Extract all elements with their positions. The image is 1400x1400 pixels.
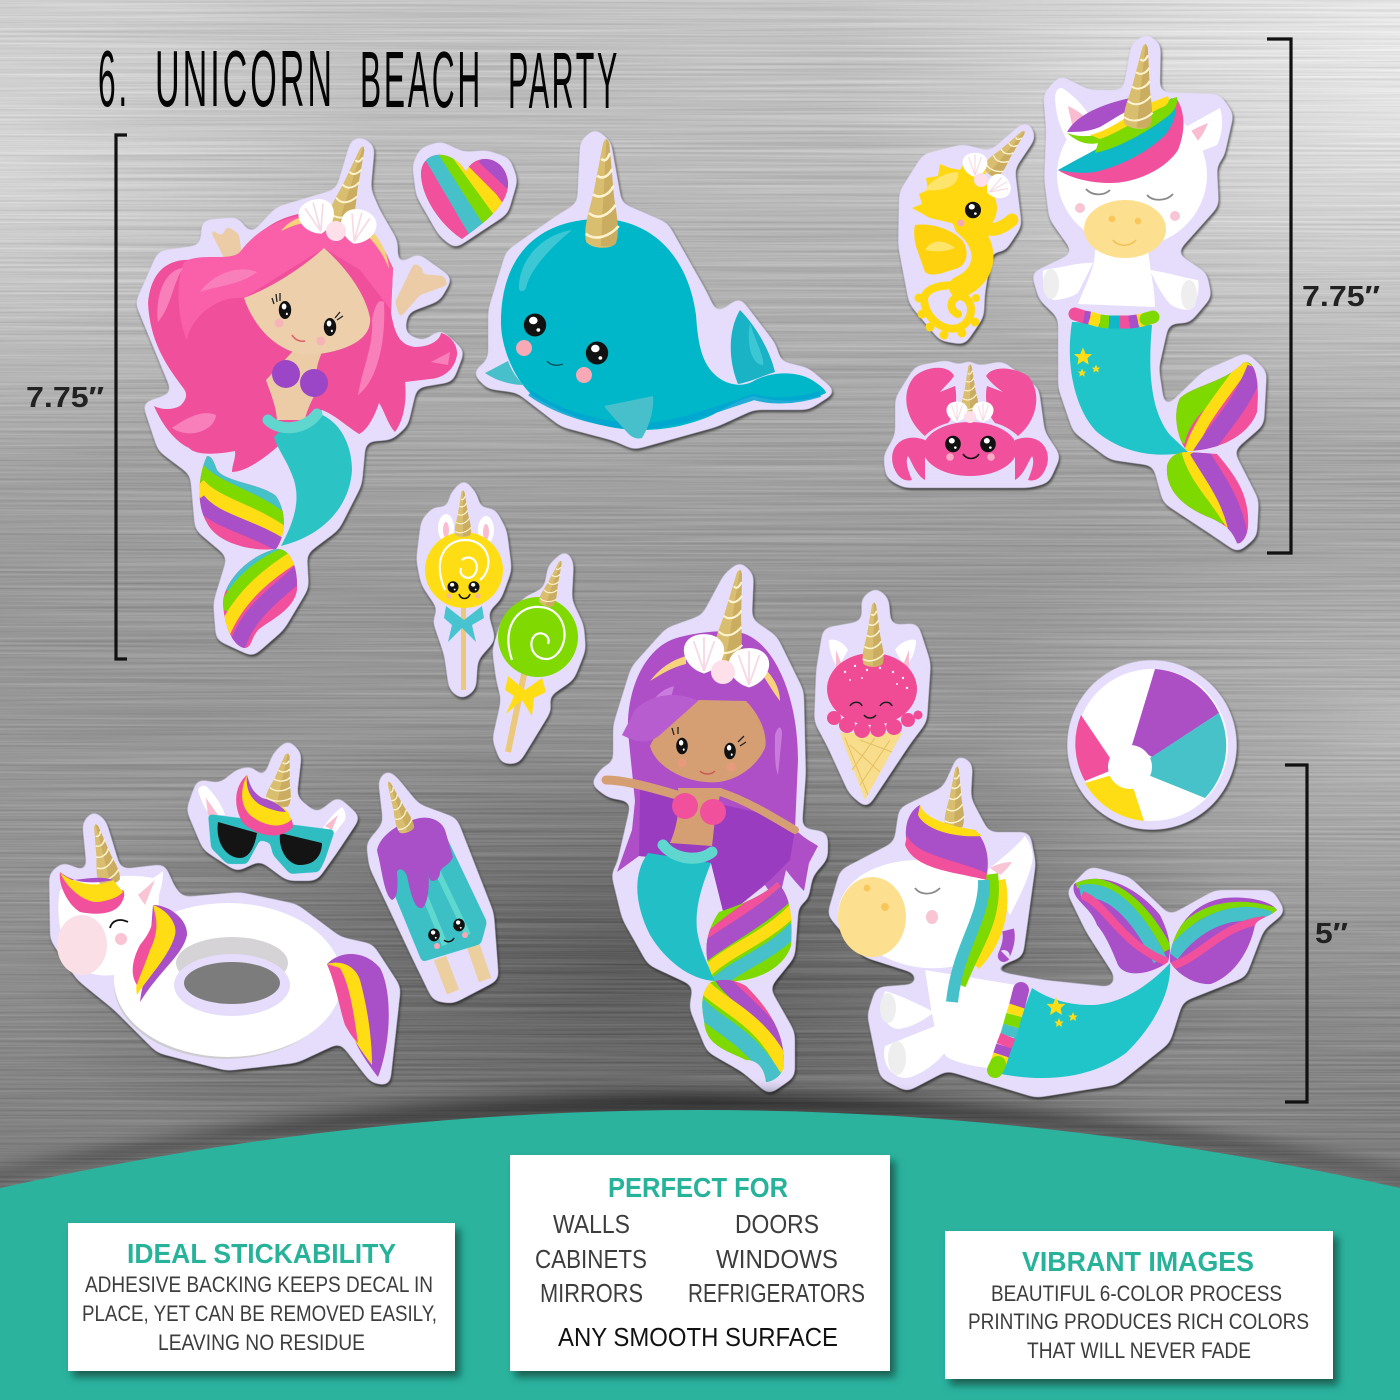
body text: LEAVING NO RESIDUE: [158, 1330, 365, 1355]
sticker: purple mermaid: [590, 561, 828, 1095]
die-cut backing: [1067, 660, 1237, 830]
face: [850, 702, 892, 718]
face: [650, 700, 766, 782]
die-cut backing: [186, 739, 361, 881]
teal panel: [1148, 713, 1226, 798]
torso: [670, 788, 722, 846]
dimension: left bracket 7.75 inches: [26, 135, 127, 659]
die-cut backing: [49, 810, 401, 1086]
lower rainbow fin: [1166, 452, 1248, 544]
heading: PERFECT FOR: [608, 1172, 788, 1203]
horn: [981, 124, 1032, 180]
die-cut backing: [814, 587, 931, 809]
right fluke: [1170, 898, 1277, 984]
sticker: yellow lollipop: [416, 478, 512, 700]
horn: [862, 602, 885, 667]
rainbow mane: [952, 874, 1009, 1002]
torso: [266, 350, 322, 420]
die-cut backing: [416, 478, 512, 700]
face: [945, 436, 996, 461]
sticker: popsicle: [366, 769, 499, 1004]
die-cut backing: [412, 141, 518, 249]
hair shade: [639, 790, 795, 915]
sticks: [440, 945, 485, 992]
tail: [1070, 322, 1188, 455]
gold headband: [281, 217, 389, 269]
forelock: [60, 872, 124, 914]
horn: [1123, 42, 1160, 130]
fringe: [622, 695, 698, 741]
ball base: [1076, 669, 1228, 821]
horn: [85, 821, 122, 887]
lenses: [218, 822, 322, 865]
tail spiral: [924, 285, 971, 329]
sticker: unicorn mermaid: [1031, 33, 1267, 553]
ears: [829, 640, 916, 668]
horn: [264, 751, 300, 809]
body text: PLACE, YET CAN BE REMOVED EASILY,: [82, 1301, 437, 1326]
shell bra: [272, 360, 328, 397]
claws: [906, 368, 1036, 436]
dimension: right bracket 5 inches: 5″: [1315, 918, 1348, 950]
die-cut backing: [883, 358, 1061, 488]
candy ball: [498, 597, 578, 677]
die-cut backing: [1031, 33, 1267, 553]
title: UNICORN: [155, 34, 335, 123]
die-cut backing: [898, 122, 1036, 345]
scoop: [827, 653, 917, 725]
eye and cheek: [915, 888, 940, 924]
ear: [130, 871, 163, 905]
body text: THAT WILL NEVER FADE: [1027, 1338, 1251, 1363]
frame: [208, 814, 335, 874]
crest: [912, 162, 990, 225]
dorsal fin: [731, 310, 775, 384]
belly shade: [530, 393, 820, 426]
head: [1057, 103, 1207, 247]
inner ring backing: [174, 954, 290, 1016]
surfaces list: WALLS: [553, 1209, 630, 1239]
waffle cone: [840, 733, 902, 800]
title: BEACH: [360, 35, 483, 124]
crest highlight: [925, 172, 958, 190]
stick: [461, 606, 466, 690]
hair: [617, 631, 818, 915]
surfaces list: REFRIGERATORS: [688, 1278, 865, 1308]
face: [244, 248, 370, 355]
body text: PRINTING PRODUCES RICH COLORS: [968, 1309, 1309, 1334]
waist band: [663, 845, 712, 858]
stars: [1074, 348, 1100, 377]
shell crown: [946, 402, 994, 423]
ears: [198, 786, 346, 833]
candy swirl: [508, 607, 565, 660]
body highlights: [519, 230, 763, 365]
stars: [1046, 997, 1078, 1027]
wing highlight: [925, 242, 955, 251]
surfaces list: MIRRORS: [540, 1278, 643, 1308]
shell crown: [963, 153, 1015, 204]
head: [838, 860, 991, 968]
lower rainbow fin: [702, 980, 784, 1082]
die-cut backing: [827, 754, 1286, 1098]
shell crown: [295, 195, 380, 248]
bow: [444, 606, 484, 642]
neck mane: [133, 905, 187, 1002]
hair: [148, 213, 457, 472]
sticker: rainbow heart: [412, 141, 518, 249]
sticker: green lollipop: [492, 549, 586, 764]
muzzle: [57, 915, 107, 975]
panel: ideal stickability: [68, 1223, 455, 1371]
left fluke: [1074, 878, 1170, 974]
dimension: right bracket 7.75 inches: [1267, 39, 1380, 553]
purple panel: [1132, 669, 1219, 757]
surfaces list: [535, 1209, 865, 1308]
rainbow band: [995, 990, 1021, 1070]
hair top sheen: [179, 213, 393, 340]
ears: [1055, 88, 1222, 155]
wing: [914, 224, 967, 275]
purple glaze: [377, 818, 453, 908]
face: [446, 581, 480, 598]
horn: [585, 137, 623, 249]
hair highlight: [645, 686, 782, 775]
horn: [380, 778, 416, 835]
panel: perfect for: [510, 1155, 890, 1371]
scoop frill: [827, 710, 922, 738]
rainbow belt: [1075, 314, 1153, 322]
head: [58, 876, 160, 975]
sticker: pink unicorn mermaid: [135, 137, 465, 657]
flippers: [485, 361, 653, 439]
rainbow stripes: [420, 154, 508, 239]
pink panel: [1075, 715, 1112, 781]
tail: [637, 853, 715, 981]
closed eyes and cheeks: [1075, 189, 1180, 221]
any smooth surface: ANY SMOOTH SURFACE: [558, 1322, 838, 1352]
lower rainbow fin: [223, 549, 298, 648]
rainbow mane: [1058, 96, 1183, 183]
candy swirl: [440, 540, 488, 590]
face: [428, 919, 468, 949]
body light stripes: [410, 860, 468, 945]
teal arc footer: [0, 1103, 1400, 1400]
sticker: sunglasses: [186, 739, 361, 881]
body: [923, 422, 1017, 476]
panel: vibrant images: [945, 1231, 1333, 1379]
surfaces list: CABINETS: [535, 1244, 647, 1274]
arm hands: [209, 226, 448, 318]
sprinkles: [844, 665, 908, 689]
forelock: [905, 805, 988, 880]
hair highlights: [157, 268, 450, 433]
sticker: unicorn pool float: [49, 810, 401, 1086]
sticker: unicorn mermaid lying down: [827, 754, 1286, 1098]
die-cut backing: [492, 549, 586, 764]
face: [516, 314, 608, 383]
tail spikes: [914, 294, 980, 340]
eye and cheek: [110, 920, 128, 945]
shell crown: [684, 634, 769, 688]
body: [376, 838, 487, 962]
candy ball: [425, 532, 503, 608]
ring shadow: [114, 909, 338, 1059]
gold headband: [650, 656, 780, 701]
neck and belly: [960, 225, 982, 287]
horn: [455, 490, 471, 537]
upper rainbow fin: [200, 456, 284, 550]
torso and arms: [1043, 250, 1199, 310]
body text: ADHESIVE BACKING KEEPS DECAL IN: [85, 1272, 433, 1297]
body text: [968, 1281, 1309, 1363]
title: 6.: [98, 34, 130, 123]
dimension: right bracket 7.75 inches: 7.75″: [1302, 281, 1380, 313]
die-cut backing: [590, 561, 828, 1095]
legs: [892, 438, 1048, 480]
body: [925, 970, 1016, 1070]
horn: [961, 364, 979, 414]
head and snout: [947, 183, 1012, 233]
muzzle: [1084, 200, 1166, 258]
sticker: beach ball: [1067, 660, 1237, 830]
tail: [1001, 963, 1170, 1078]
text: PARTY: [508, 36, 620, 125]
tail: [327, 954, 389, 1077]
upper rainbow fin: [706, 882, 792, 982]
upper rainbow fin: [1176, 362, 1258, 451]
body: [501, 219, 826, 430]
centre disc: [1108, 745, 1152, 789]
sticker: narwhal: [472, 128, 837, 450]
face features: [672, 727, 746, 774]
waist band: [268, 414, 317, 428]
ring hole: [184, 962, 280, 1004]
body text: [82, 1272, 437, 1355]
ring: [114, 903, 342, 1057]
surfaces list: WINDOWS: [716, 1244, 838, 1274]
legs: [880, 991, 947, 1078]
die-cut backing: [366, 769, 499, 1004]
sticker: ice cream cone: [814, 587, 931, 809]
horn: [712, 567, 754, 664]
horn: [326, 142, 375, 229]
dimension: left bracket 7.75 inches: 7.75″: [26, 382, 104, 414]
arms: [606, 780, 795, 830]
muzzle: [838, 877, 906, 957]
surfaces list: DOORS: [735, 1209, 819, 1239]
sticker: crab: [883, 358, 1061, 488]
dimension: right bracket 5 inches: [1285, 765, 1348, 1102]
ears: [438, 514, 494, 544]
die-cut backing: [472, 128, 837, 450]
horn: [538, 558, 569, 609]
yellow panel: [1085, 775, 1144, 821]
eye and cheek: [957, 202, 981, 227]
forelock: [236, 775, 293, 836]
face features: [272, 293, 343, 346]
bow: [505, 676, 546, 716]
sticker: seahorse: [898, 122, 1036, 345]
heading: VIBRANT IMAGES: [1022, 1246, 1254, 1277]
horn: [944, 766, 967, 829]
ear: [985, 836, 1033, 915]
body text: BEAUTIFUL 6-COLOR PROCESS: [991, 1281, 1282, 1306]
tail: [274, 413, 352, 546]
stick: [508, 670, 525, 752]
inner ring shade: [176, 937, 288, 989]
bra: [672, 793, 726, 825]
heading: IDEAL STICKABILITY: [127, 1238, 396, 1269]
die-cut backing: [135, 137, 465, 657]
